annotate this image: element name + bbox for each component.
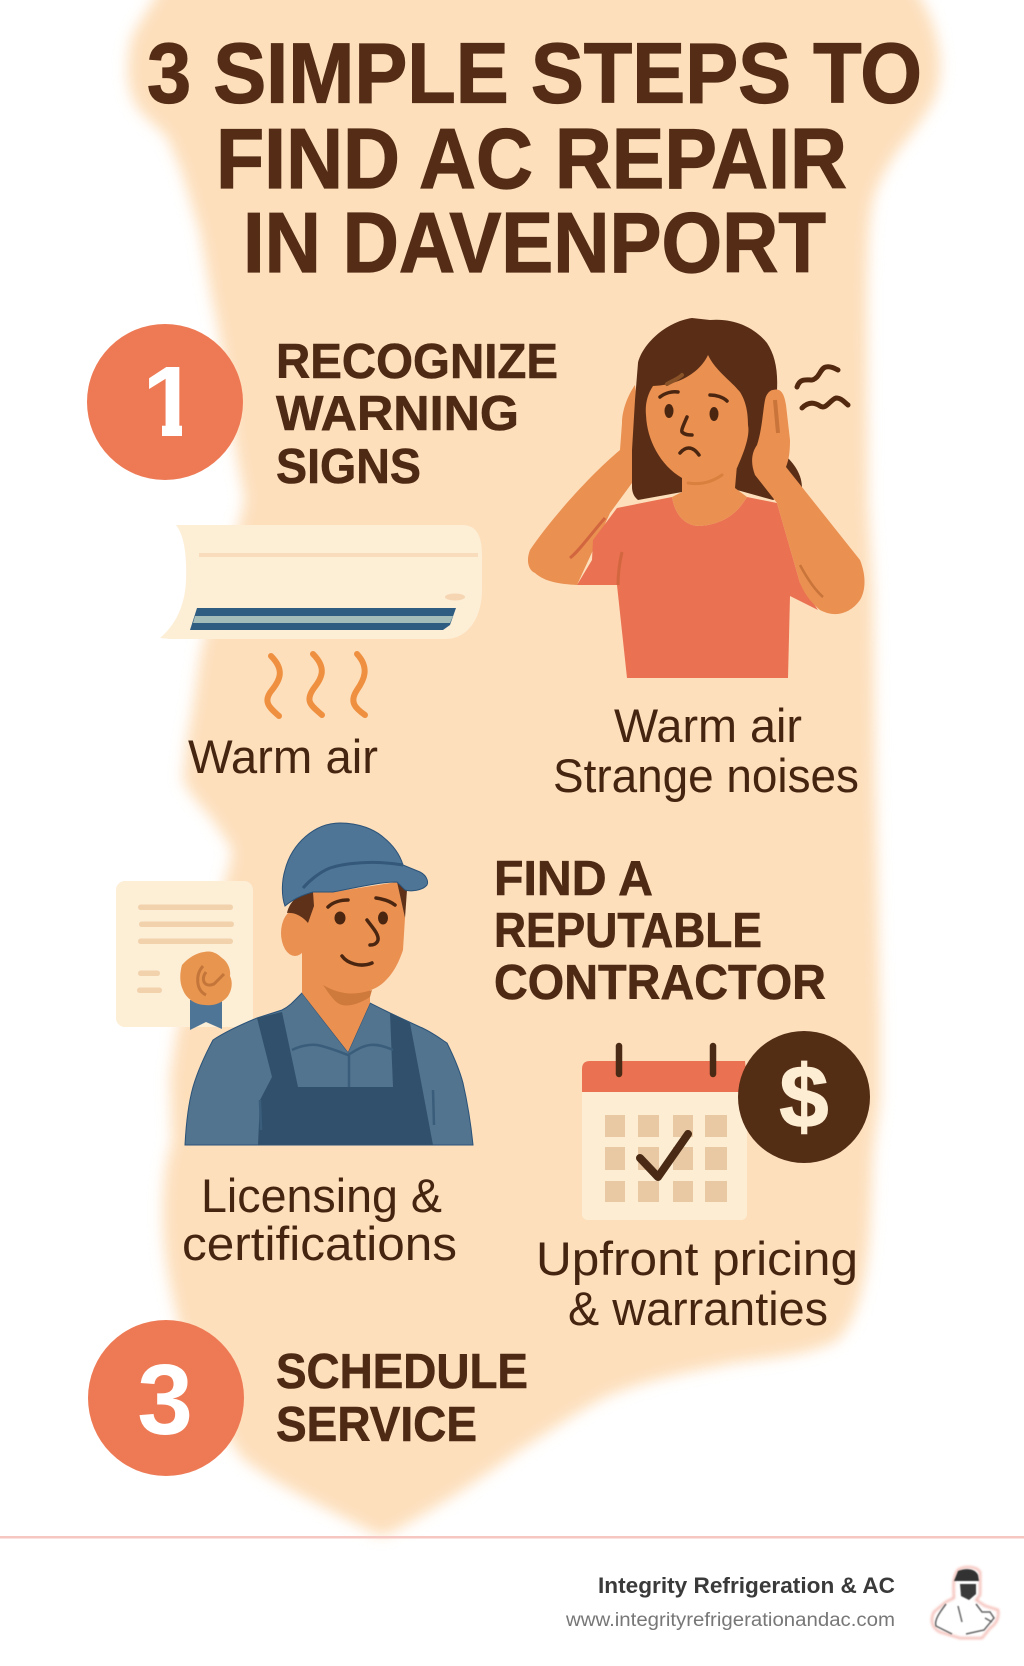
title: [147, 26, 922, 291]
step 1 badge: 1: [142, 346, 198, 458]
step 2 heading: CONTRACTOR: [494, 956, 826, 1010]
step 2 heading: [494, 852, 826, 1010]
icon: noise squiggles: [797, 367, 848, 408]
head: [300, 882, 405, 993]
illustration: woman covering ears: [528, 318, 864, 678]
icon: warm air waves: [267, 654, 365, 716]
ear: [281, 910, 309, 956]
step 3 badge: 3: [137, 1344, 193, 1456]
right arm and hand: [752, 390, 864, 614]
footer brand text: [565, 1573, 895, 1631]
step 2 heading: FIND A: [494, 852, 653, 906]
icon: certificate: [116, 881, 253, 1030]
icon: footer logo: [932, 1567, 998, 1638]
step 2 heading: REPUTABLE: [494, 904, 762, 958]
icon: dollar coin: $: [780, 1047, 828, 1146]
face details: [664, 404, 674, 418]
icon: air conditioner: [160, 525, 482, 639]
step 1 heading: SIGNS: [276, 440, 421, 494]
label: warm air, strange noises: [553, 699, 859, 802]
title: 3 SIMPLE STEPS TO: [147, 26, 922, 122]
label: warm air: Warm air: [188, 730, 378, 783]
step 3 heading: [276, 1345, 528, 1452]
footer brand text: Integrity Refrigeration & AC: [598, 1573, 895, 1598]
neck: [672, 465, 747, 526]
face: [334, 912, 346, 924]
face: [646, 355, 748, 481]
label: licensing and certifications: certifications: [182, 1217, 457, 1270]
label: warm air, strange noises: Warm air: [614, 699, 802, 752]
step 3 heading: SCHEDULE: [276, 1345, 528, 1399]
step 1 heading: RECOGNIZE: [276, 335, 558, 389]
label: upfront pricing and warranties: Upfront pricing: [536, 1232, 858, 1285]
icon: dollar coin: [738, 1031, 870, 1163]
label: licensing and certifications: Licensing &: [201, 1169, 442, 1222]
neck: [302, 955, 370, 1052]
label: upfront pricing and warranties: [536, 1232, 858, 1335]
step 1 heading: WARNING: [276, 387, 519, 441]
hair: [287, 892, 314, 923]
step 1 heading: [276, 335, 558, 494]
shirt: [577, 497, 818, 678]
step 3 heading: SERVICE: [276, 1398, 477, 1452]
label: upfront pricing and warranties: & warranties: [568, 1282, 828, 1335]
title: FIND AC REPAIR: [216, 112, 847, 207]
shirt: [185, 993, 473, 1145]
title: IN DAVENPORT: [243, 196, 826, 291]
step 1 badge: [87, 324, 243, 480]
illustration: technician: [185, 823, 473, 1145]
icon: calendar: [582, 1046, 748, 1220]
footer brand text: www.integrityrefrigerationandac.com: [565, 1610, 895, 1631]
step 3 badge: [88, 1320, 244, 1476]
cap: [282, 823, 428, 906]
label: licensing and certifications: [182, 1169, 457, 1270]
collar folds: [260, 1045, 434, 1130]
background blob: [128, 0, 940, 1535]
overalls: [257, 1012, 433, 1145]
left arm: [528, 385, 640, 585]
label: warm air, strange noises: Strange noises: [553, 749, 859, 802]
hair: [632, 318, 802, 500]
